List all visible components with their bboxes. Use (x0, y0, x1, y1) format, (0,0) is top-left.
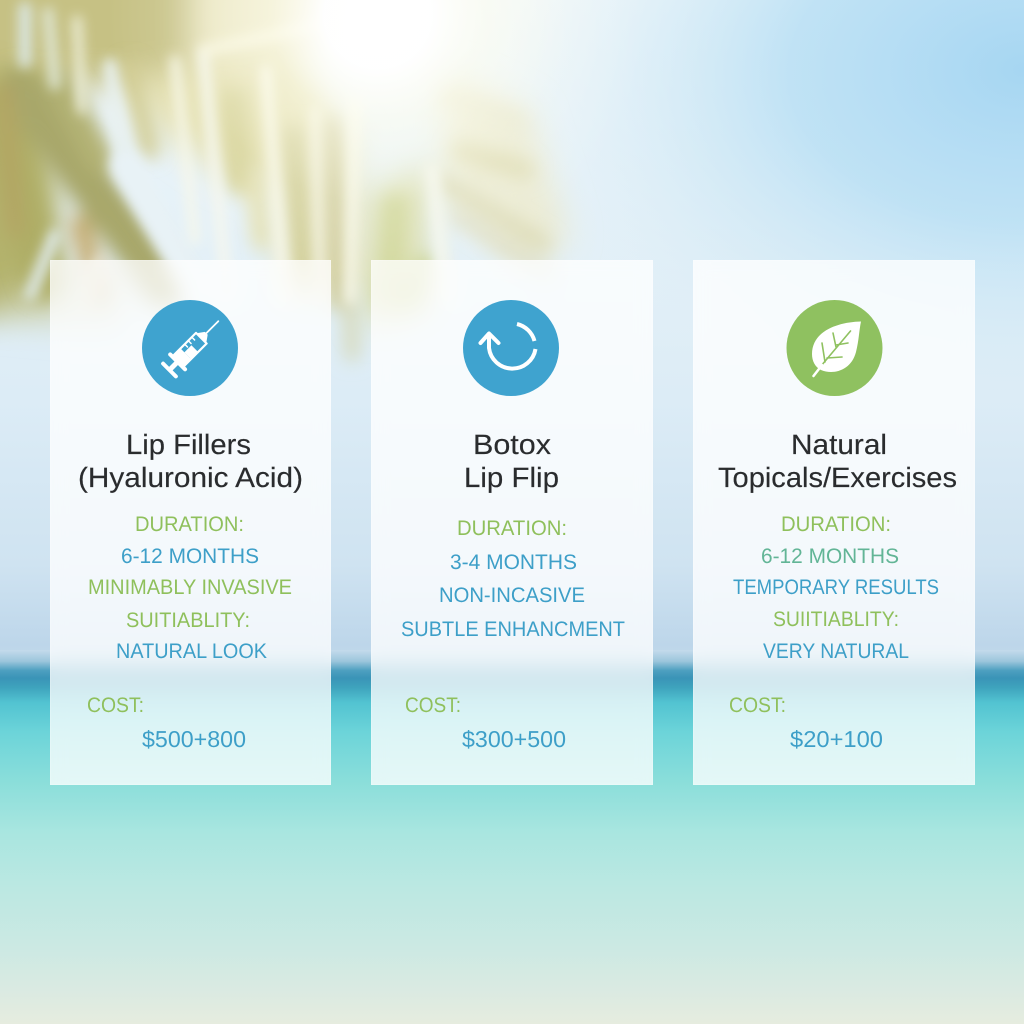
text: details: NATURAL LOOK (116, 640, 267, 663)
icon: circular arrow (463, 300, 559, 396)
text: details: 6-12 MONTHS (121, 545, 259, 568)
text: details: VERY NATURAL (763, 640, 909, 663)
text: cost: COST: (729, 694, 786, 717)
panel: lip fillers (50, 260, 331, 785)
heading: lip fillers: (Hyaluronic Acid) (78, 462, 303, 493)
text: details: DURATION: (781, 513, 891, 536)
text: cost: $500+800 (142, 726, 246, 752)
text: cost (729, 694, 883, 752)
text: details (88, 513, 292, 663)
text: details: SUIITIABLITY: (773, 608, 899, 631)
icon: leaf (786, 300, 882, 396)
text: details: SUITIABLITY: (126, 609, 250, 632)
heading: lip fillers: Lip Fillers (126, 429, 251, 460)
heading: lip fillers (78, 429, 303, 493)
text: details: DURATION: (457, 517, 567, 540)
text: details: 6-12 MONTHS (761, 545, 899, 568)
text: details: TEMPORARY RESULTS (733, 576, 939, 599)
text: cost (405, 694, 566, 752)
text: details (733, 513, 939, 663)
text: cost: $300+500 (462, 726, 566, 752)
text: cost: COST: (87, 694, 144, 717)
heading: natural topicals/exercises: Topicals/Exercises (718, 462, 957, 493)
text: details: DURATION: (135, 513, 244, 536)
heading: botox lip flip: Botox (473, 429, 551, 460)
panel: botox lip flip (371, 260, 653, 785)
heading: natural topicals/exercises: Natural (791, 429, 887, 460)
icon: syringe (142, 300, 238, 396)
text: details (401, 517, 625, 641)
text: details: NON-INCASIVE (439, 584, 585, 607)
text: details: MINIMABLY INVASIVE (88, 576, 292, 599)
heading: botox lip flip: Lip Flip (464, 462, 559, 493)
text: cost: $20+100 (790, 726, 883, 752)
heading: natural topicals/exercises (718, 429, 957, 493)
text: cost (87, 694, 246, 752)
text: details: SUBTLE ENHANCMENT (401, 618, 625, 641)
panel: natural topicals (693, 260, 975, 785)
text: details: 3-4 MONTHS (450, 551, 577, 574)
text: cost: COST: (405, 694, 461, 717)
heading: botox lip flip (464, 429, 559, 493)
